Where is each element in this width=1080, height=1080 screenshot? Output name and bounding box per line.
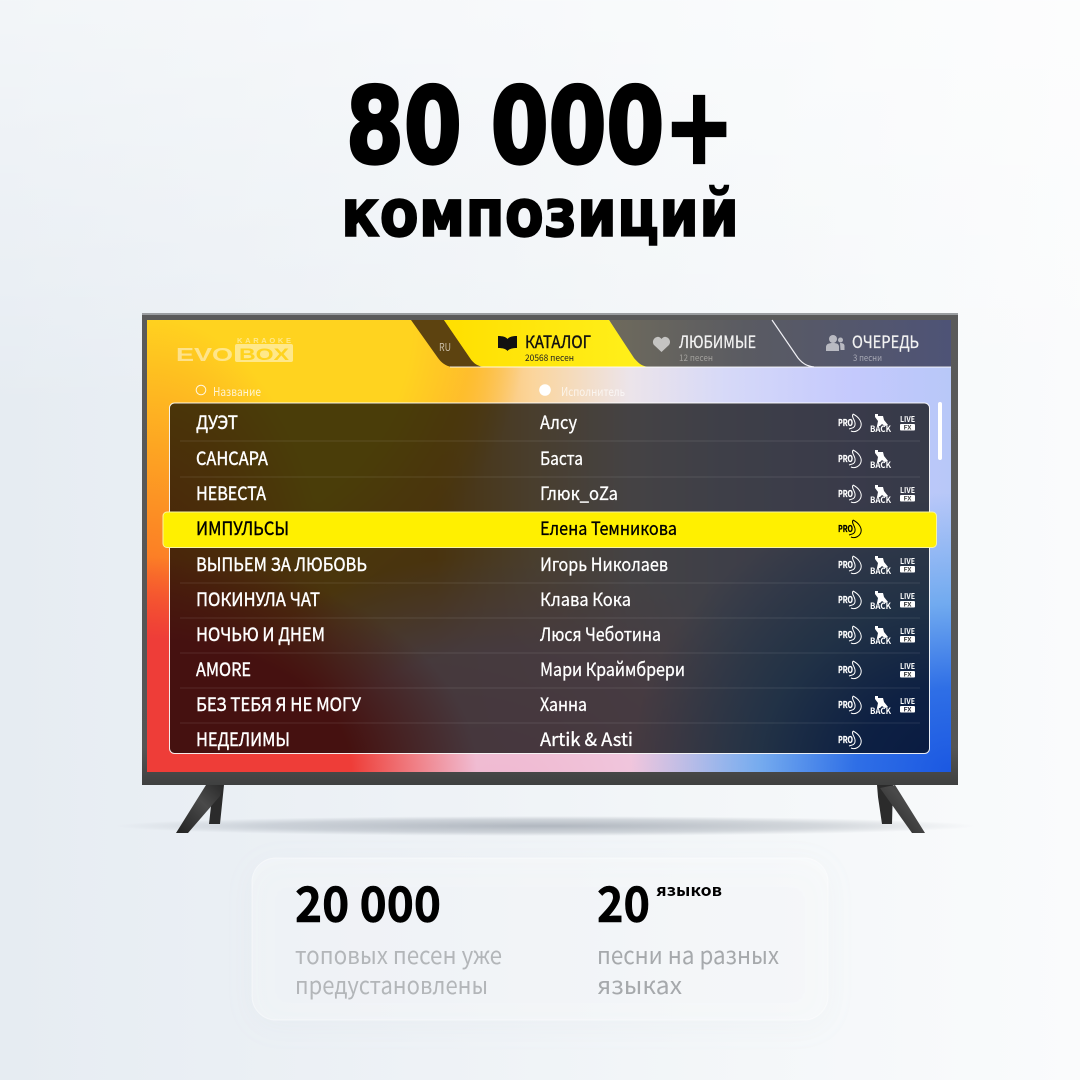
- row 9: PRO: [838, 698, 853, 711]
- row 5: LIVE: [900, 556, 915, 567]
- row 8: AMORE: [196, 656, 251, 682]
- row 3: PRO: [838, 487, 853, 500]
- row 7: FX: [904, 634, 912, 644]
- tab divider: [772, 320, 814, 367]
- row 9: FX: [904, 704, 912, 714]
- row 8: [196, 656, 915, 682]
- row 6: BACK: [870, 600, 891, 612]
- stat: 20: 20: [597, 866, 650, 937]
- row 8: FX: [904, 670, 912, 678]
- TV stand right: [877, 785, 925, 833]
- row 2: BACK: [870, 459, 891, 471]
- row 5: BACK: [870, 565, 891, 577]
- row 6: Клава Кока: [540, 586, 631, 612]
- logo EVOBOX: [176, 336, 293, 365]
- row 3: FX: [904, 494, 912, 502]
- header bottom line: [450, 366, 951, 368]
- row 6: PRO: [838, 593, 853, 606]
- tab label: catalog: КАТАЛОГ: [525, 328, 591, 353]
- tab label: queue: ОЧЕРЕДЬ: [852, 328, 919, 353]
- stat text: songs in different languages: языках: [597, 966, 682, 1001]
- row 7: Люся Чеботина: [540, 621, 661, 647]
- song list panel: [170, 403, 930, 754]
- scrollbar: [938, 402, 942, 460]
- row 9: [196, 691, 915, 717]
- title word: композиций: [341, 175, 739, 252]
- row 7: LIVE: [900, 626, 915, 637]
- row 3: Глюк_оZa: [540, 480, 618, 506]
- stat unit: languages: языков: [656, 877, 722, 901]
- row 9: БЕЗ ТЕБЯ Я НЕ МОГУ: [196, 691, 361, 717]
- logo EVOBOX: BOX: [239, 345, 290, 364]
- tab: RU: RU: [439, 339, 451, 355]
- row 6: FX: [904, 600, 912, 608]
- row 3: LIVE: [900, 485, 915, 496]
- stat text: songs in different languages: песни на разных: [597, 936, 779, 971]
- tab header dark band: [609, 320, 951, 367]
- row 4 highlighted: Елена Темникова: [540, 515, 677, 541]
- tab: catalog: [444, 320, 648, 367]
- row 10: Artik & Asti: [540, 726, 633, 752]
- row 10: [196, 726, 861, 752]
- icon: open book: [498, 336, 517, 351]
- row 7: PRO: [838, 628, 853, 641]
- row 10: PRO: [838, 733, 853, 746]
- stat: 20 000: 20 000: [295, 866, 441, 937]
- row 1: Алсу: [540, 409, 577, 435]
- row 5: [196, 551, 915, 577]
- row 4 highlighted: PRO: [838, 522, 853, 535]
- TV screen background gradient: [147, 320, 951, 772]
- row 2: [196, 445, 891, 471]
- row 9: LIVE: [900, 696, 915, 707]
- row 1: [196, 409, 915, 435]
- icon: people: [826, 335, 844, 351]
- stat text: preinstalled songs: [295, 936, 502, 1001]
- row 7: BACK: [870, 635, 891, 647]
- row 1: FX: [904, 422, 912, 432]
- row 7: НОЧЬЮ И ДНЕМ: [196, 621, 325, 647]
- sort option: title: [196, 383, 261, 400]
- row 4 highlighted: ИМПУЛЬСЫ: [196, 515, 289, 541]
- row 1: PRO: [838, 416, 853, 429]
- row 5: Игорь Николаев: [540, 551, 668, 577]
- row 2: Баста: [540, 445, 583, 471]
- row 8: Мари Краймбрери: [540, 656, 685, 682]
- TV stand left: [176, 785, 224, 833]
- stat text: preinstalled songs: топовых песен уже: [295, 936, 502, 971]
- row 8: PRO: [838, 663, 853, 676]
- stat text: songs in different languages: [597, 936, 779, 1001]
- stat text: preinstalled songs: предустановлены: [295, 966, 488, 1001]
- row 5: FX: [904, 564, 912, 574]
- row 3: НЕВЕСТА: [196, 480, 267, 506]
- tab count: queue: 3 песни: [853, 351, 882, 364]
- row 5: ВЫПЬЕМ ЗА ЛЮБОВЬ: [196, 551, 367, 577]
- row 3: [196, 480, 915, 506]
- sort option: artist: Исполнитель: [561, 383, 625, 400]
- tab: favourites: [653, 328, 756, 364]
- title number: 80 000+: [346, 66, 734, 188]
- tab: queue: [826, 328, 919, 364]
- row 10: НЕДЕЛИМЫ: [196, 726, 290, 752]
- row 1: LIVE: [900, 414, 915, 425]
- row 6: ПОКИНУЛА ЧАТ: [196, 586, 320, 612]
- logo EVOBOX: EVO: [176, 345, 233, 365]
- sort option: artist: [539, 383, 625, 400]
- row 6: [196, 586, 915, 612]
- row 1: ДУЭТ: [196, 409, 238, 435]
- row 2: САНСАРА: [196, 445, 269, 471]
- row 7: [196, 621, 915, 647]
- row 6: LIVE: [900, 591, 915, 602]
- stats card: [252, 858, 828, 1020]
- row 3: BACK: [870, 494, 891, 506]
- icon: heart: [653, 337, 670, 352]
- tab count: catalog: 20568 песен: [525, 351, 574, 364]
- row 5: PRO: [838, 558, 853, 571]
- row 2: PRO: [838, 452, 853, 465]
- TV frame: [142, 313, 958, 785]
- logo EVOBOX: KARAOKE: [237, 336, 291, 345]
- sort option: title: Название: [213, 383, 261, 400]
- row 9: BACK: [870, 705, 891, 717]
- background shadow under TV: [115, 816, 975, 836]
- row 9: Ханна: [540, 691, 587, 717]
- tab count: favourites: 12 песен: [679, 351, 713, 364]
- tab label: favourites: ЛЮБИМЫЕ: [679, 328, 756, 353]
- tab: RU: [411, 320, 484, 367]
- row 8: LIVE: [900, 661, 915, 672]
- row 1: BACK: [870, 423, 891, 435]
- row 4 highlighted: [163, 512, 936, 548]
